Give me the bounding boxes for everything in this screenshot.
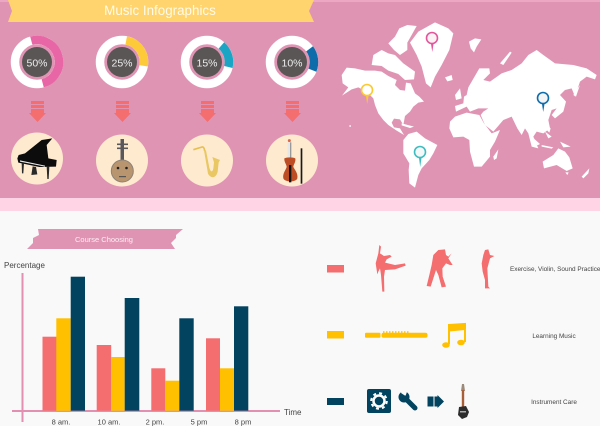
icon: wrench (398, 389, 415, 408)
panel: top pink background (0, 0, 600, 211)
Eurasia (455, 50, 597, 148)
x axis labels (52, 418, 251, 426)
South America (403, 132, 437, 188)
pin: Asia (538, 92, 548, 112)
Islands: SE Asia (530, 125, 571, 149)
pin: Greenland (426, 32, 438, 52)
donut: 15%: 15% (196, 58, 218, 70)
legend row: care (327, 384, 577, 419)
icon: arrow (428, 395, 444, 408)
icon: violin and bow (266, 134, 318, 186)
arrow: violin (284, 101, 301, 122)
pin: South America (414, 146, 426, 167)
arrow: saxophone (199, 101, 216, 122)
note heads (442, 340, 465, 348)
Greenland (410, 22, 453, 87)
bar chart (4, 261, 302, 426)
arrow: piano (29, 101, 46, 122)
pin: North America (362, 84, 372, 104)
icon: dancer silhouette (376, 245, 406, 292)
donut: 50%: 50% (26, 58, 48, 70)
world map (342, 22, 597, 188)
section banner: Course Choosing (27, 229, 183, 249)
donut: 10% (270, 40, 314, 84)
legend text: practice: Exercise, Violin, Sound Practice (510, 266, 600, 273)
icon: musician silhouette (482, 249, 494, 288)
arrow: pipa (114, 101, 131, 122)
axis label: Time: Time (284, 408, 302, 417)
icon: music notes (449, 324, 465, 344)
icon: violinist silhouette (427, 249, 453, 287)
icon: grand piano (11, 132, 63, 184)
chart axes (12, 273, 280, 422)
icon: saxophone (181, 134, 233, 186)
bars: 5 pm (206, 306, 248, 411)
donut: 15% (185, 40, 229, 84)
legend text: learning: Learning Music (532, 333, 576, 340)
Arctic islands (372, 25, 417, 80)
donut: 10%: 10% (281, 58, 303, 70)
section banner: Course Choosing: Course Choosing (75, 235, 133, 244)
legend text: care: Instrument Care (531, 399, 577, 406)
title banner: Music Infographics (104, 3, 216, 18)
icon: bass guitar (458, 384, 469, 419)
icon: settings gear (367, 389, 391, 413)
legend row: practice (327, 245, 600, 292)
legend swatch: yellow (327, 331, 344, 338)
United Kingdom (455, 88, 462, 100)
bars: 8 am. (42, 277, 85, 411)
legend swatch: navy (327, 398, 344, 405)
legend swatch: coral (327, 265, 344, 272)
Africa (449, 113, 500, 167)
North America (342, 68, 424, 135)
Cuba (402, 123, 414, 128)
legend row: learning (327, 324, 576, 348)
donut: 25% (100, 40, 144, 84)
title banner (8, 0, 314, 22)
Iceland (469, 38, 481, 52)
bars: 10 am. (97, 298, 139, 411)
icon: pipa lute (96, 134, 148, 186)
axis label: Percentage: Percentage (4, 261, 45, 270)
donut: 50% (15, 40, 59, 84)
icon: flute (365, 332, 428, 338)
Australia (543, 148, 573, 171)
bars: 2 pm. (151, 318, 194, 411)
donut: 25%: 25% (111, 58, 133, 70)
